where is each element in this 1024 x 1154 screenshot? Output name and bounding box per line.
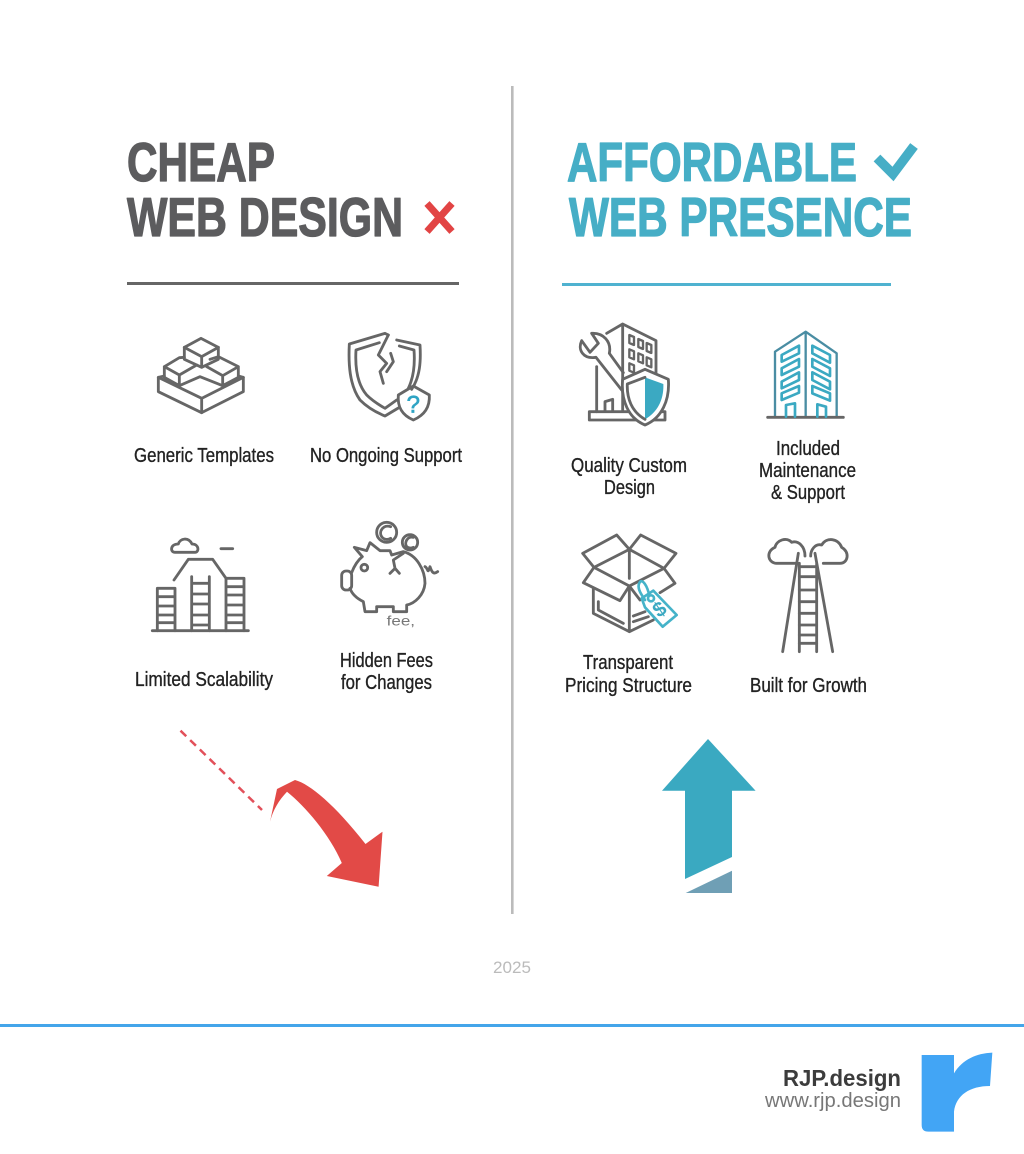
- icon: cracked piggy bank: [342, 522, 438, 629]
- arrow: red downward arrow: [270, 780, 382, 887]
- logo: blue r mark: [922, 1053, 992, 1132]
- footer brand text: www.rjp.design: [764, 1090, 901, 1112]
- icon: limited scalability towers: [152, 539, 248, 631]
- year label: 2025: [493, 958, 531, 977]
- label: transparent pricing structure: Transparent: [583, 652, 673, 674]
- label: quality custom design: Design: [604, 477, 655, 499]
- label: included maintenance and support: Included: [776, 438, 840, 460]
- arrow: teal upward arrow: [662, 739, 756, 893]
- label: hidden fees for changes: [340, 650, 433, 694]
- label: included maintenance and support: [759, 438, 856, 504]
- heading: cheap web design: WEB DESIGN: [127, 186, 403, 248]
- icon: teal building: [768, 332, 843, 417]
- label: included maintenance and support: Maintenance: [759, 460, 856, 482]
- footer rule: [0, 1024, 1024, 1027]
- icon: wrench, building and shield: [580, 324, 669, 425]
- label: no ongoing support: No Ongoing Support: [310, 445, 462, 467]
- panel: affordable web presence: [562, 131, 914, 893]
- label: built for growth: Built for Growth: [750, 675, 867, 697]
- panel: cheap web design: [127, 131, 462, 887]
- label: limited scalability: Limited Scalability: [135, 669, 273, 691]
- icon: red cross: [427, 204, 452, 232]
- footer brand text: RJP.design: [783, 1065, 901, 1091]
- icon: open box with price tag: [583, 535, 677, 632]
- icon: broken shield: [349, 333, 429, 420]
- label: transparent pricing structure: [565, 652, 692, 697]
- icon: generic templates blocks: [158, 338, 243, 413]
- label: hidden fees for changes: for Changes: [341, 672, 432, 694]
- icon: dashed decline line: [180, 731, 262, 810]
- label: quality custom design: Quality Custom: [571, 455, 687, 477]
- label: generic templates: Generic Templates: [134, 445, 274, 467]
- icon: broken shield: ?: [407, 391, 420, 418]
- icon: open box with price tag: $: [648, 597, 671, 622]
- heading: affordable web presence: AFFORDABLE: [567, 131, 857, 193]
- label: transparent pricing structure: Pricing Structure: [565, 675, 692, 697]
- icon: teal check mark: [877, 146, 914, 174]
- label: included maintenance and support: & Support: [771, 482, 845, 504]
- heading: affordable web presence: [567, 131, 912, 248]
- heading: cheap web design: CHEAP: [127, 131, 275, 193]
- footer brand text: [764, 1065, 901, 1112]
- label: quality custom design: [571, 455, 687, 499]
- heading: cheap web design: [127, 131, 403, 248]
- heading: affordable web presence: WEB PRESENCE: [569, 186, 912, 248]
- icon: ladder into clouds: [769, 539, 847, 652]
- label: hidden fees for changes: Hidden Fees: [340, 650, 433, 672]
- icon: cracked piggy bank: fee,: [387, 613, 415, 629]
